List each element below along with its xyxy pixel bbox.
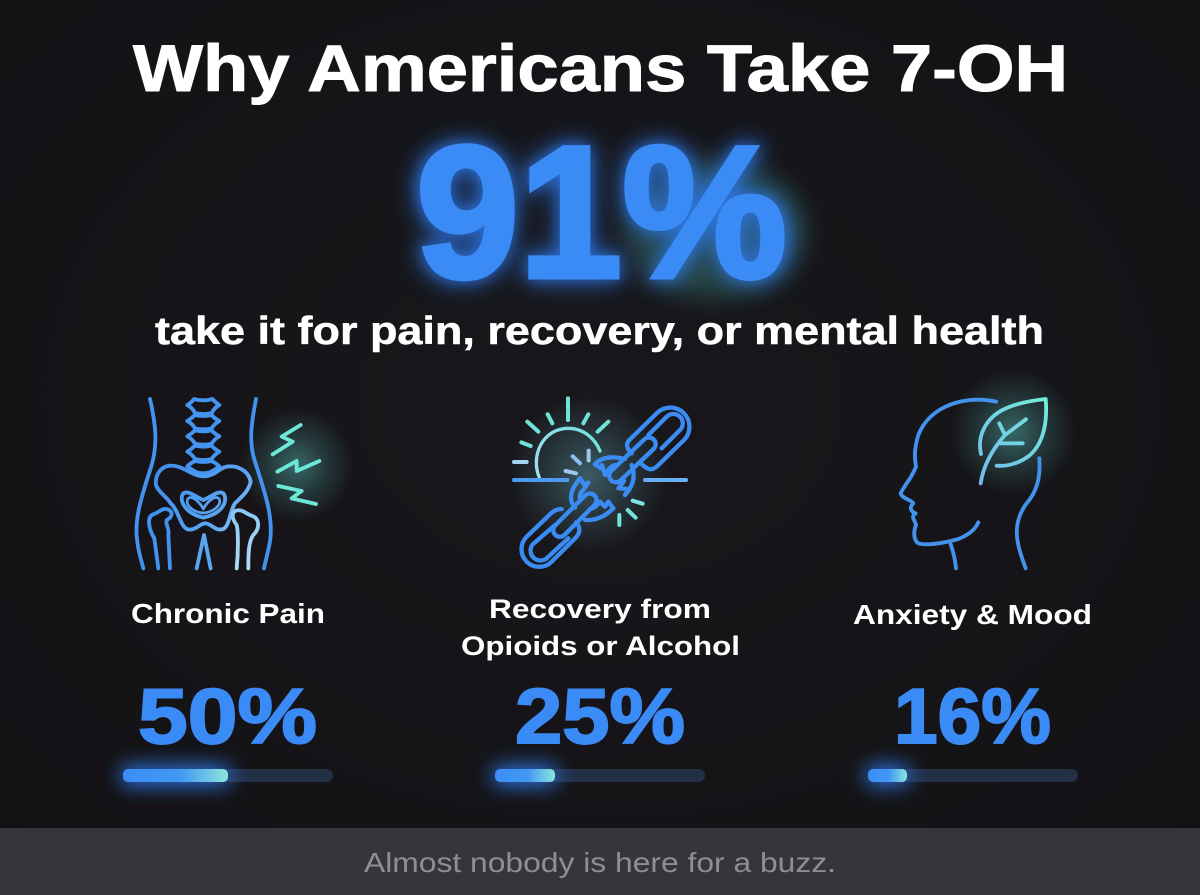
progress bar 50% bbox=[120, 766, 333, 785]
headline stat: 91%: 91% bbox=[414, 107, 789, 317]
subtitle: take it for pain, recovery, or mental health bbox=[155, 310, 1044, 353]
icon: pelvis and spine with pain bolts bbox=[136, 399, 353, 568]
label: Chronic Pain bbox=[131, 598, 325, 629]
panel: recovery: Opioids or Alcohol bbox=[461, 631, 740, 661]
title: Why Americans Take 7-OH bbox=[133, 31, 1068, 105]
panel: anxiety and mood bbox=[853, 368, 1092, 785]
label: Recovery from bbox=[489, 594, 711, 624]
value: 25% bbox=[515, 672, 685, 760]
headline stat: 91%: 91% bbox=[414, 107, 789, 317]
icon: broken chain and sunrise bbox=[508, 395, 689, 567]
value: 16% bbox=[894, 672, 1051, 760]
panel: chronic pain bbox=[120, 399, 353, 785]
headline stat: 91%: 91% bbox=[416, 107, 787, 317]
progress bar 25% bbox=[492, 766, 705, 785]
label: Anxiety & Mood bbox=[853, 599, 1092, 630]
footer text: Almost nobody is here for a buzz. bbox=[364, 847, 836, 878]
icon: head with leaf bbox=[901, 368, 1077, 568]
value: 50% bbox=[138, 672, 317, 760]
progress bar 16% bbox=[865, 766, 1078, 785]
panel: recovery bbox=[461, 395, 740, 785]
footer band bbox=[0, 828, 1200, 895]
